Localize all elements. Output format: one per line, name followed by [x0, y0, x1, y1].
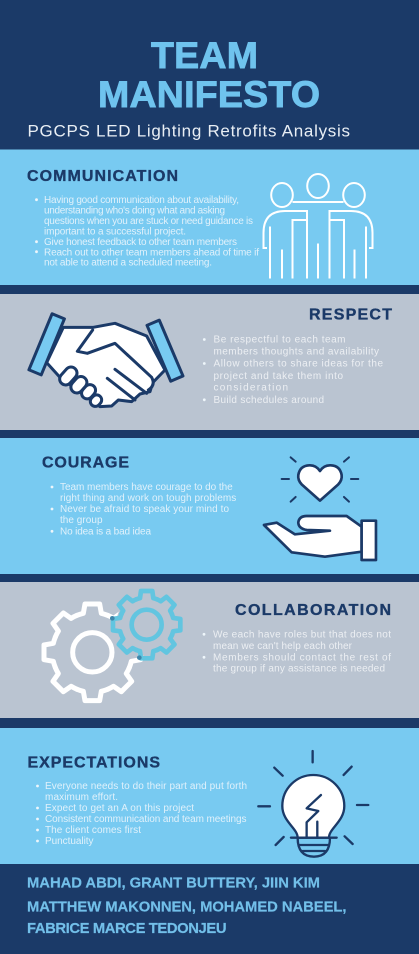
text block: collaboration bullets: mean we can't help each other: [213, 641, 353, 652]
text block: expectations bullets: The client comes first: [45, 825, 141, 836]
text block: respect bullets: consideration: [214, 383, 288, 394]
text block: communication bullets: Reach out to other team members ahead of time if: [44, 247, 259, 258]
panel: expectations: [0, 728, 419, 864]
text block: collaboration bullets: We each have roles but that does not: [213, 629, 391, 640]
footer: team member names: MAHAD ABDI, GRANT BUTTERY, JIIN KIM: [27, 876, 320, 892]
title: MANIFESTO: [98, 73, 320, 115]
text block: respect bullets: members thoughts and availability: [214, 347, 379, 358]
footer: team member names: [27, 876, 346, 937]
text block: respect bullets: project and take them into: [214, 371, 343, 382]
text block: communication bullets: not able to attend a scheduled meeting.: [44, 258, 212, 268]
text block: courage bullets: Team members have courage to do the: [60, 482, 233, 493]
text block: expectations bullets: Punctuality: [45, 836, 94, 847]
text block: communication bullets: understanding who's doing what and asking: [44, 205, 225, 216]
text block: courage bullets: the group: [60, 515, 103, 526]
heading: collaboration: COLLABORATION: [235, 602, 391, 619]
heading: respect: RESPECT: [309, 306, 392, 323]
title: TEAM: [151, 34, 258, 76]
icon: blue gear: [113, 591, 180, 658]
text block: respect bullets: Build schedules around: [214, 395, 324, 406]
title: [98, 34, 320, 115]
text block: expectations bullets: maximum effort.: [45, 792, 118, 803]
icon: team of people: [264, 174, 372, 278]
text block: collaboration bullets: the group if any assistance is needed: [213, 664, 385, 675]
text block: respect bullets: [203, 335, 383, 406]
text block: courage bullets: [51, 482, 236, 537]
text block: collaboration bullets: Members should contact the rest of: [213, 652, 391, 663]
heading: courage: COURAGE: [42, 455, 129, 472]
text block: communication bullets: [35, 195, 259, 268]
text block: communication bullets: questions when you are stuck or need guidance is: [44, 216, 253, 227]
heading: expectations: EXPECTATIONS: [28, 755, 160, 772]
text block: expectations bullets: Expect to get an A on this project: [45, 803, 194, 814]
heading: communication: COMMUNICATION: [27, 168, 178, 185]
text block: communication bullets: Having good communication about availability,: [44, 195, 239, 206]
panel: communication: [0, 150, 419, 285]
footer: team member names: MATTHEW MAKONNEN, MOHAMED NABEEL,: [27, 900, 346, 916]
icon: white gear: [44, 604, 141, 701]
panel: collaboration: [0, 582, 419, 718]
icon: handshake: [29, 314, 183, 408]
footer: team member names: FABRICE MARCE TEDONJEU: [27, 921, 226, 937]
icon: gears: [44, 591, 180, 701]
text block: respect bullets: Be respectful to each team: [214, 335, 346, 346]
subtitle: PGCPS LED Lighting Retrofits Analysis: [28, 121, 350, 140]
text block: courage bullets: right thing and work on tough problems: [60, 493, 236, 504]
panel: courage: [0, 438, 419, 574]
text block: communication bullets: Give honest feedback to other team members: [44, 237, 237, 248]
header: [28, 34, 350, 140]
text block: communication bullets: important to a successful project.: [44, 226, 186, 238]
text block: respect bullets: Allow others to share ideas for the: [214, 359, 383, 370]
text block: expectations bullets: [36, 781, 247, 847]
icon: light bulb: [258, 751, 368, 857]
text block: expectations bullets: Consistent communication and team meetings: [45, 814, 246, 825]
text block: expectations bullets: Everyone needs to do their part and put forth: [45, 781, 247, 792]
text block: courage bullets: Never be afraid to speak your mind to: [60, 504, 229, 515]
text block: courage bullets: No idea is a bad idea: [60, 526, 151, 537]
icon: heart in hand: [264, 457, 376, 560]
panel: respect: [0, 294, 419, 430]
text block: collaboration bullets: [203, 629, 391, 675]
